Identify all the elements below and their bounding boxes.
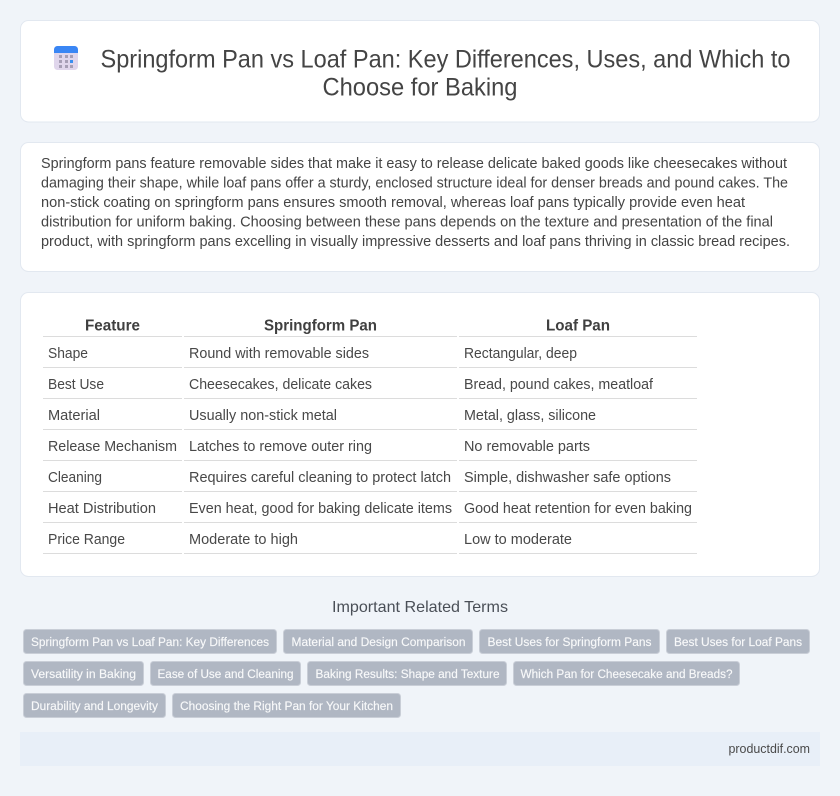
text block: description — [41, 156, 790, 250]
tag — [24, 694, 166, 718]
row: heat distribution: Even heat, good for baking delicate items — [189, 501, 452, 517]
tag — [24, 630, 276, 654]
row: release mechanism: Release Mechanism — [48, 439, 177, 455]
row: material: Metal, glass, silicone — [464, 408, 596, 424]
panel: description — [20, 142, 820, 272]
row: shape: Rectangular, deep — [464, 346, 577, 362]
row: material — [48, 408, 596, 424]
heading: related terms: Important Related Terms — [332, 599, 508, 616]
tag: Springform Pan vs Loaf Pan: Key Differences — [31, 635, 269, 649]
tag — [24, 662, 144, 686]
tag — [480, 630, 660, 654]
row: best use — [48, 377, 654, 393]
tag: Choosing the Right Pan for Your Kitchen — [180, 699, 393, 713]
row: shape — [48, 346, 577, 362]
footer: productdif.com — [728, 742, 810, 756]
tag: Versatility in Baking — [31, 667, 136, 681]
tag — [666, 630, 810, 654]
tag list — [24, 630, 810, 718]
title: Choose for Baking — [322, 74, 518, 102]
row: best use: Best Use — [48, 377, 104, 393]
row: heat distribution: Heat Distribution — [48, 501, 156, 517]
title: Springform Pan vs Loaf Pan: Key Differences, Uses, and Which to — [100, 46, 790, 74]
row: best use: Bread, pound cakes, meatloaf — [464, 377, 654, 393]
row: price range: Price Range — [48, 532, 125, 548]
row: price range: Low to moderate — [464, 532, 572, 548]
tag — [150, 662, 300, 686]
panel: comparison table — [20, 292, 820, 576]
table header — [85, 318, 610, 335]
icon: calendar — [54, 46, 78, 70]
table header: Feature — [85, 318, 140, 335]
tag — [284, 630, 472, 654]
row: heat distribution: Good heat retention for even baking — [464, 501, 692, 517]
tag — [308, 662, 506, 686]
row: release mechanism — [48, 439, 590, 455]
tag: Which Pan for Cheesecake and Breads? — [520, 667, 733, 681]
tag: Durability and Longevity — [31, 699, 159, 713]
row: best use: Cheesecakes, delicate cakes — [189, 377, 372, 393]
table grid — [43, 336, 697, 554]
tag: Best Uses for Springform Pans — [488, 635, 652, 649]
text block: description: damaging their shape, while loaf pans offer a sturdy, enclosed structure ideal for denser breads and pound cakes. The — [41, 176, 788, 192]
row: release mechanism: No removable parts — [464, 439, 590, 455]
row: price range — [48, 532, 572, 548]
tag: Baking Results: Shape and Texture — [316, 667, 500, 681]
text block: description: Springform pans feature removable sides that make it easy to release delicate baked goods like cheesecakes without — [41, 156, 787, 172]
text block: description: non-stick coating on springform pans ensures smooth removal, whereas loaf pans typically provide even heat — [41, 195, 745, 211]
row: cleaning: Simple, dishwasher safe options — [464, 470, 671, 486]
row: cleaning: Requires careful cleaning to protect latch — [189, 470, 451, 486]
tag: Material and Design Comparison — [292, 635, 466, 649]
row: material: Usually non-stick metal — [189, 408, 337, 424]
table header: Springform Pan — [264, 318, 377, 335]
tag: Best Uses for Loaf Pans — [674, 635, 802, 649]
text block: description: distribution for uniform baking. Choosing between these pans depends on the texture and presentation of the final — [41, 214, 773, 230]
row: release mechanism: Latches to remove outer ring — [189, 439, 372, 455]
tag — [172, 694, 400, 718]
row: material: Material — [48, 408, 100, 424]
table header: Loaf Pan — [546, 318, 610, 335]
row: heat distribution — [48, 501, 692, 517]
tag — [514, 662, 740, 686]
tag: Ease of Use and Cleaning — [158, 667, 294, 681]
panel: header — [20, 20, 820, 122]
row: shape: Shape — [48, 346, 88, 362]
row: shape: Round with removable sides — [189, 346, 369, 362]
title — [100, 46, 790, 102]
text block: description: product, with springform pans excelling in visually impressive desserts and loaf pans thriving in classic bread recipes. — [41, 234, 790, 250]
row: cleaning — [48, 470, 671, 486]
footer — [20, 732, 820, 766]
row: price range: Moderate to high — [189, 532, 298, 548]
row: cleaning: Cleaning — [48, 470, 102, 486]
